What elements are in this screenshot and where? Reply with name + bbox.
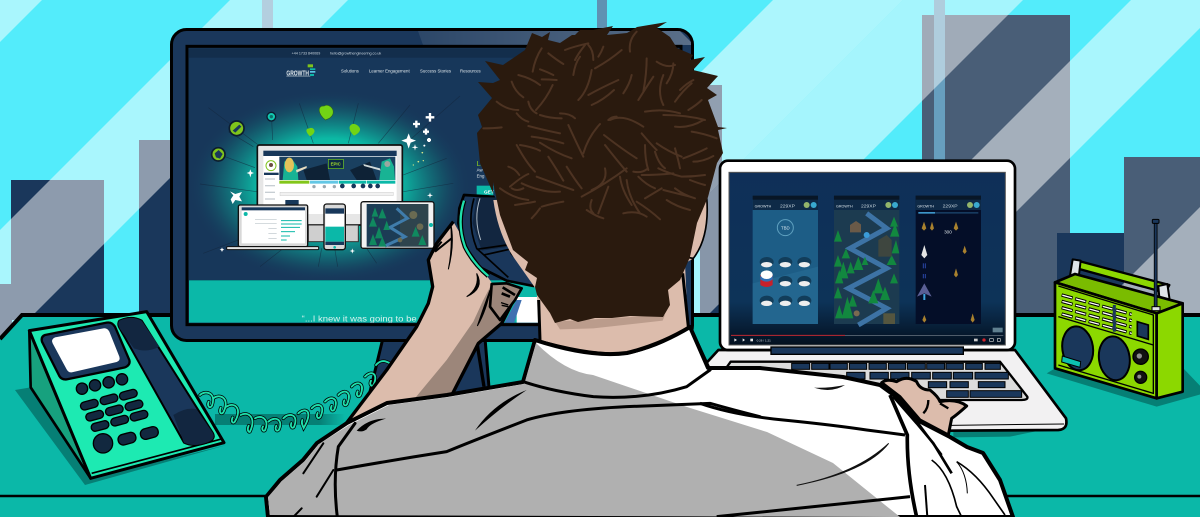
telephone side face (29, 331, 91, 478)
radio body (1055, 274, 1183, 398)
website navigation (341, 69, 480, 74)
game screen: forest map (834, 196, 899, 325)
laptop hinge (771, 347, 963, 354)
device: desktop computer: EPIC (331, 162, 341, 167)
game screen: forest map: 229XP (861, 203, 877, 209)
website right-hand intro text: Aw (477, 168, 483, 173)
sparkles and plus signs (220, 113, 434, 254)
game screen: whack-a-mole: GROWTH (755, 204, 772, 208)
website right-hand intro text: GET (484, 190, 494, 195)
coiled phone cord (200, 361, 390, 432)
website right-hand intro text: Eng (477, 174, 485, 179)
telephone receiver (458, 195, 536, 320)
neck and ears (493, 197, 707, 370)
website logo (286, 64, 315, 78)
website logo: GROWTH (286, 69, 309, 78)
city skyline buildings (0, 0, 1200, 344)
teal glow (203, 100, 456, 273)
radio speakers (1059, 324, 1133, 382)
radio knobs (1133, 349, 1148, 383)
website navigation: Solutions (341, 68, 359, 73)
phone cord shadow (215, 414, 345, 425)
radio antenna (1152, 219, 1160, 311)
radio shadow (1047, 368, 1200, 407)
telephone keypad (76, 374, 159, 453)
laptop base (700, 350, 1066, 431)
video progress bar and controls: 0:26 / 1:21 (757, 338, 771, 342)
green radio (1047, 219, 1200, 407)
man's raised arm and hand (345, 222, 518, 425)
website navigation: Success Stories (420, 68, 451, 73)
monitor screen website (187, 46, 682, 325)
shirt (266, 327, 1013, 517)
game screen: space shooter: GROWTH (917, 204, 934, 208)
desktop monitor (172, 30, 692, 340)
game screen: forest map: GROWTH (836, 204, 853, 208)
radiating rays (200, 96, 460, 267)
laptop (700, 161, 1067, 437)
device: smartphone (324, 204, 345, 250)
laptop shadow (953, 425, 1067, 437)
device: laptop (227, 205, 319, 250)
radio handle (1069, 259, 1171, 307)
website right-hand intro text: L (477, 159, 481, 168)
radio grille (1062, 295, 1132, 333)
game screen: space shooter: 229XP (943, 203, 958, 209)
shirt white base (266, 327, 1013, 517)
website top bar (189, 48, 526, 58)
website navigation: Learner Engagement (369, 68, 410, 73)
hand on laptop keyboard (882, 378, 967, 435)
video progress bar and controls (731, 328, 1003, 342)
telephone shadow (15, 387, 227, 485)
man's spiky brown hair (477, 22, 727, 323)
laptop keyboard (720, 362, 1027, 400)
desk telephone (15, 312, 227, 485)
floating badges and hearts (212, 105, 360, 161)
telephone handset (118, 318, 214, 445)
game screen: space shooter: 300 (944, 230, 952, 235)
game screen: whack-a-mole: TBD (781, 226, 790, 231)
game screen: space shooter (916, 196, 981, 324)
monitor bezel (172, 30, 692, 340)
monitor stand (368, 338, 490, 400)
website top bar: hello@growthengineering.co.uk (330, 51, 381, 55)
laptop lid (720, 161, 1015, 350)
website teal testimonial band (189, 280, 538, 323)
hair strands (483, 32, 717, 219)
shirt fold lines (293, 327, 760, 517)
telephone top face (29, 312, 224, 478)
game screen: whack-a-mole (753, 196, 818, 324)
game screen: whack-a-mole: 229XP (780, 203, 796, 209)
website teal testimonial band: “...I knew it was going to be (302, 314, 417, 324)
website top bar: +44 1733 840069 (292, 51, 320, 55)
shirt grey shaded area (268, 343, 900, 517)
website right-hand intro text (477, 159, 494, 196)
laptop screen (729, 172, 1005, 345)
device: tablet with game map (361, 202, 434, 248)
radio label (1062, 356, 1081, 367)
man from behind (266, 22, 1013, 517)
website navigation: Resources (460, 68, 481, 73)
telephone display (42, 322, 130, 379)
desk surface (0, 315, 1200, 517)
device: desktop computer (257, 145, 402, 242)
radio tuning window (1137, 322, 1148, 339)
